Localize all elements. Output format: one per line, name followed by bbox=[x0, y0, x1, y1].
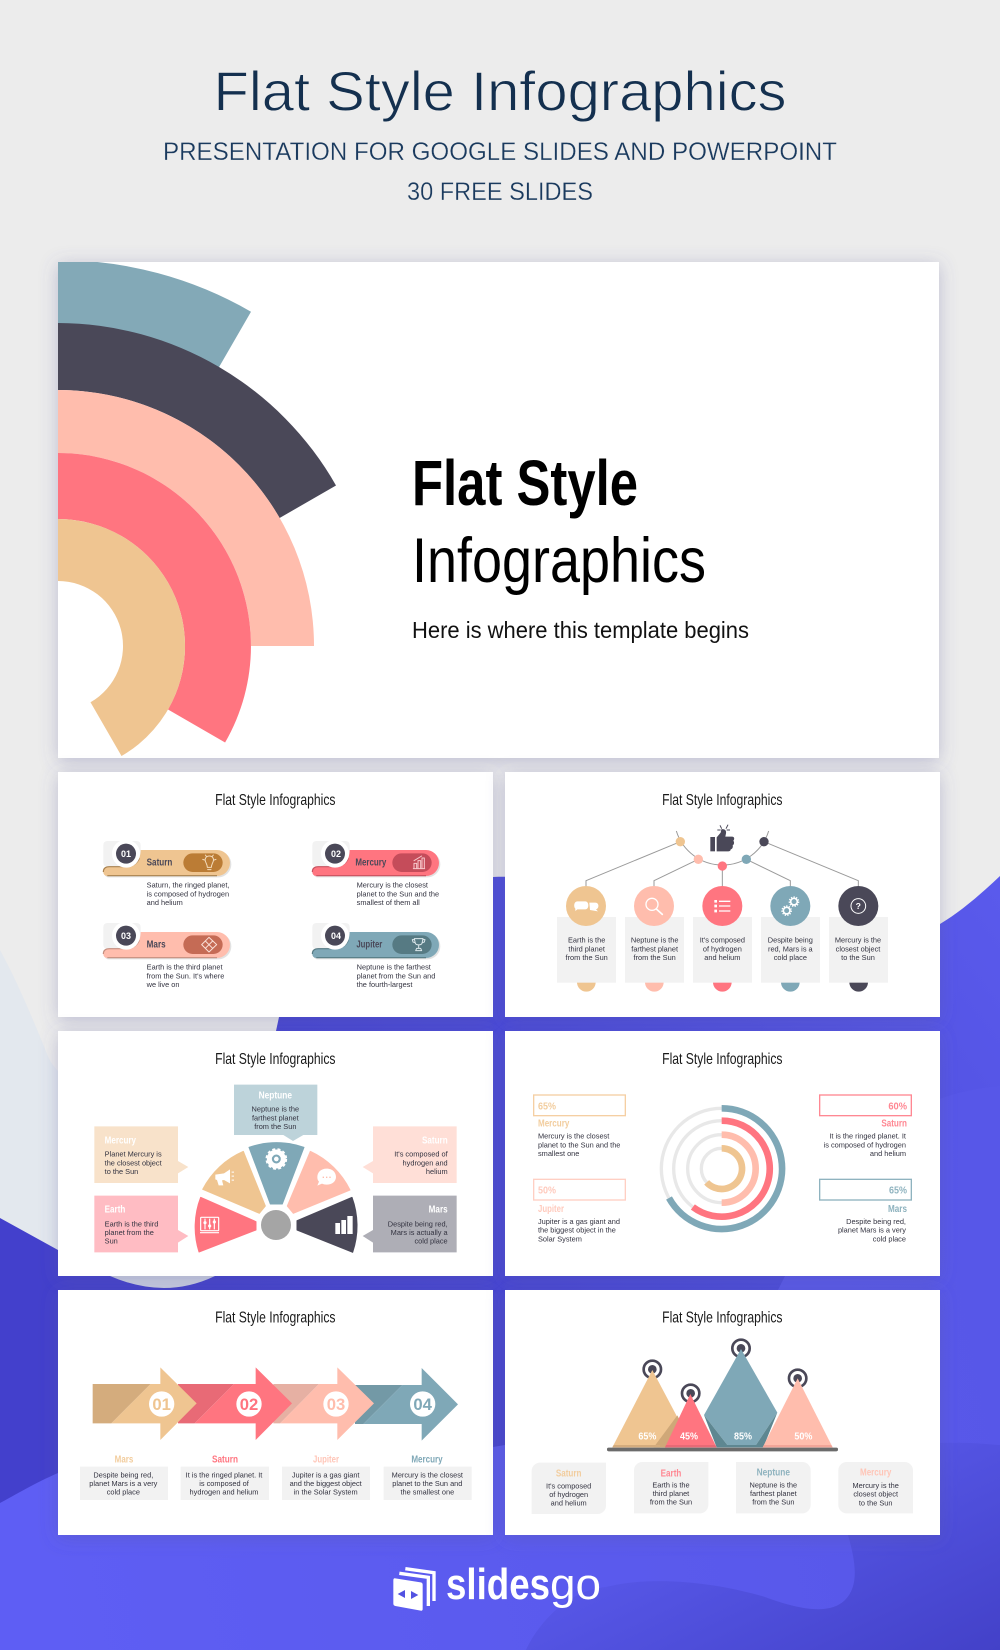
card: Neptune: from the Sun bbox=[634, 953, 676, 962]
card: Earth: Earth is the bbox=[568, 936, 605, 945]
card: composition bbox=[693, 886, 752, 992]
callout: Earth: Earth bbox=[105, 1205, 125, 1216]
icon: speech bubble bbox=[317, 1169, 336, 1186]
arrow 03 bbox=[273, 1367, 374, 1440]
card: Neptune: farthest planet bbox=[750, 1489, 797, 1498]
target markers bbox=[644, 1340, 806, 1402]
slide title: Flat Style Infographics bbox=[662, 1051, 782, 1068]
baseline bar bbox=[607, 1448, 838, 1451]
callout: Earth bbox=[94, 1196, 188, 1252]
callout: Saturn: helium bbox=[426, 1167, 448, 1176]
stat: Saturn: It is the ringed planet. It bbox=[829, 1132, 906, 1141]
stat: Jupiter: Jupiter is a gas giant and bbox=[538, 1217, 620, 1226]
callout: Saturn bbox=[363, 1126, 457, 1183]
item: Jupiter: Jupiter bbox=[356, 940, 382, 951]
item: Mercury: 02 bbox=[331, 849, 341, 859]
hero heading bbox=[412, 447, 706, 596]
item: Saturn bbox=[103, 840, 231, 907]
card: Saturn: It's composed bbox=[546, 1481, 591, 1490]
item: Saturn: is composed of hydrogen bbox=[147, 889, 229, 898]
label: Mars bbox=[80, 1455, 168, 1500]
callout: Mercury: Planet Mercury is bbox=[105, 1150, 162, 1159]
card: Mars bbox=[761, 886, 820, 992]
hero heading: Flat Style bbox=[412, 447, 638, 519]
stat: Mercury: planet to the Sun and the bbox=[538, 1140, 620, 1149]
stat: Mars: Mars bbox=[888, 1204, 907, 1215]
panel: numbered pills bbox=[58, 772, 493, 1017]
panel: triangle peaks bbox=[505, 1290, 940, 1535]
label: Jupiter: Jupiter is a gas giant bbox=[292, 1470, 359, 1479]
callout: Neptune: from the Sun bbox=[254, 1122, 296, 1131]
label: Mercury: Mercury bbox=[411, 1455, 443, 1466]
panel: radial progress bbox=[505, 1031, 940, 1276]
callout: Neptune bbox=[234, 1085, 317, 1141]
label: Jupiter: in the Solar System bbox=[294, 1488, 358, 1497]
stat: Saturn: 60% bbox=[888, 1101, 907, 1112]
item: Mars: Earth is the third planet bbox=[147, 963, 223, 972]
logo: slidesgo: slides bbox=[446, 1560, 550, 1609]
card: Saturn: of hydrogen bbox=[549, 1490, 588, 1499]
label: Mercury: Mercury is the closest bbox=[392, 1470, 463, 1479]
item: Mars: we live on bbox=[146, 980, 179, 989]
stat: Mars: 65% bbox=[889, 1186, 907, 1197]
card: Mercury: Mercury is the bbox=[835, 936, 881, 945]
item: Mars: 03 bbox=[121, 931, 131, 941]
card: Mercury: Mercury bbox=[860, 1468, 892, 1479]
label: Saturn: Saturn bbox=[212, 1455, 238, 1466]
label: Saturn: is composed of bbox=[199, 1479, 250, 1488]
card: Neptune bbox=[736, 1462, 811, 1513]
slide title: Flat Style Infographics bbox=[662, 792, 782, 809]
arrow 02: 02 bbox=[240, 1395, 258, 1414]
connector nodes bbox=[676, 837, 769, 871]
icon: thumbs up bbox=[710, 825, 734, 851]
stat: Jupiter bbox=[534, 1179, 625, 1243]
item: Jupiter bbox=[312, 922, 440, 989]
arrow 04 bbox=[355, 1368, 458, 1441]
card: Neptune: Neptune is the bbox=[631, 936, 678, 945]
hero subheading: Here is where this template begins bbox=[412, 617, 749, 643]
item: Mercury: planet to the Sun and the bbox=[357, 889, 439, 898]
callout: Mercury: to the Sun bbox=[105, 1167, 138, 1176]
card: Earth: third planet bbox=[653, 1489, 689, 1498]
callout: Mars bbox=[363, 1196, 457, 1252]
card: Earth bbox=[634, 1462, 708, 1513]
callout: Mercury: Mercury bbox=[105, 1135, 136, 1146]
item: Jupiter: planet from the Sun and bbox=[357, 971, 435, 980]
callout: Neptune: farthest planet bbox=[252, 1113, 299, 1122]
stat: Jupiter: Jupiter bbox=[538, 1204, 564, 1215]
arrow 02 bbox=[178, 1367, 292, 1440]
arrow 04: 04 bbox=[413, 1395, 433, 1414]
callout: Mars: cold place bbox=[414, 1237, 448, 1246]
stat: Mars: cold place bbox=[873, 1234, 906, 1243]
panel: semicircle segments bbox=[58, 1031, 493, 1276]
label: Mars: Mars bbox=[115, 1455, 134, 1466]
callout: Earth: Sun bbox=[105, 1237, 118, 1246]
triangle: 85%: 85% bbox=[734, 1432, 752, 1443]
arrow 03: 03 bbox=[327, 1395, 345, 1414]
card: Mars: red, Mars is a bbox=[768, 944, 814, 953]
slide title: Flat Style Infographics bbox=[662, 1310, 782, 1327]
card: composition: and helium bbox=[704, 953, 740, 962]
slide title: Flat Style Infographics bbox=[215, 1051, 335, 1068]
stat: Mercury: Mercury bbox=[538, 1119, 570, 1130]
card: Earth bbox=[557, 886, 616, 992]
card: Mercury: to the Sun bbox=[859, 1498, 892, 1507]
callout: Mars: Despite being red, bbox=[388, 1219, 448, 1228]
chart: semicircle bbox=[195, 1143, 357, 1252]
callout: Neptune: Neptune is the bbox=[252, 1105, 299, 1114]
label: Mercury: the smallest one bbox=[400, 1488, 454, 1497]
hero heading: Infographics bbox=[412, 526, 706, 596]
icon: slides stack bbox=[393, 1569, 434, 1611]
card: Neptune: from the Sun bbox=[752, 1498, 794, 1507]
card: composition: It's composed bbox=[700, 936, 745, 945]
item: Mercury bbox=[312, 840, 440, 907]
stat: Jupiter: the biggest object in the bbox=[538, 1226, 616, 1235]
card: Earth: Earth is the bbox=[652, 1480, 690, 1489]
card: Earth: from the Sun bbox=[566, 953, 608, 962]
card: Earth: Earth bbox=[661, 1468, 681, 1479]
panel: hero slide bbox=[58, 260, 939, 758]
stat: Mercury: 65% bbox=[538, 1101, 556, 1112]
card: Saturn: and helium bbox=[551, 1499, 587, 1508]
subtitle: PRESENTATION FOR GOOGLE SLIDES AND POWERPOINT bbox=[163, 138, 837, 166]
stat: Jupiter: Solar System bbox=[538, 1234, 582, 1243]
stat: Saturn: Saturn bbox=[881, 1119, 907, 1130]
connector lines bbox=[586, 831, 858, 887]
item: Jupiter: 04 bbox=[331, 931, 341, 941]
stat: Mars: planet Mars is a very bbox=[838, 1226, 906, 1235]
triangle: 50% bbox=[763, 1378, 833, 1447]
item: Mercury: Mercury is the closest bbox=[357, 881, 428, 890]
callout: Mars: Mars bbox=[429, 1205, 448, 1216]
label: Jupiter: Jupiter bbox=[313, 1455, 339, 1466]
item: Mercury: smallest of them all bbox=[357, 898, 420, 907]
callout: Earth: Earth is the third bbox=[105, 1219, 158, 1228]
item: Jupiter: the fourth-largest bbox=[357, 980, 412, 989]
card: Mars: cold place bbox=[774, 953, 807, 962]
card: Mercury: Mercury is the bbox=[853, 1481, 899, 1490]
label: Jupiter bbox=[282, 1455, 370, 1500]
stat: Saturn bbox=[820, 1095, 911, 1158]
card: Saturn bbox=[532, 1463, 606, 1514]
slide title: Flat Style Infographics bbox=[215, 1310, 335, 1327]
logo: slidesgo: go bbox=[550, 1560, 601, 1609]
stat: Jupiter: 50% bbox=[538, 1186, 556, 1197]
card: Mercury: closest object bbox=[836, 944, 880, 953]
title: Flat Style Infographics bbox=[214, 60, 786, 122]
item: Jupiter: Neptune is the farthest bbox=[357, 963, 431, 972]
card: Earth: third planet bbox=[568, 944, 605, 953]
item: Mars bbox=[103, 922, 231, 989]
label: Saturn bbox=[181, 1455, 269, 1500]
callout: Earth: planet from the bbox=[105, 1228, 154, 1237]
chart: concentric arcs bbox=[58, 260, 336, 756]
stat: Mars: Despite being red, bbox=[846, 1217, 906, 1226]
card: composition: of hydrogen bbox=[703, 944, 742, 953]
label: Mars: cold place bbox=[107, 1488, 140, 1497]
triangle: 65% bbox=[612, 1370, 693, 1447]
callout: Saturn: hydrogen and bbox=[403, 1158, 448, 1167]
chart: concentric rings bbox=[661, 1108, 782, 1229]
item: Saturn: Saturn bbox=[147, 858, 172, 869]
card: Saturn: Saturn bbox=[556, 1468, 581, 1479]
stat: Saturn: is composed of hydrogen bbox=[824, 1140, 906, 1149]
arrow 01 bbox=[93, 1367, 197, 1440]
card: Neptune: Neptune bbox=[757, 1468, 790, 1479]
card: Mercury bbox=[838, 1462, 913, 1513]
icon: megaphone bbox=[215, 1169, 234, 1185]
panel: arrows bbox=[58, 1290, 493, 1535]
icon: sliders bbox=[200, 1217, 219, 1233]
label: Jupiter: and the biggest object bbox=[290, 1479, 362, 1488]
label: Mercury bbox=[384, 1455, 472, 1500]
arrow 01: 01 bbox=[152, 1395, 171, 1414]
card: Mercury: to the Sun bbox=[841, 953, 875, 962]
card: Mercury: ? bbox=[856, 901, 861, 911]
label: Saturn: hydrogen and helium bbox=[190, 1488, 258, 1497]
card: Mars: Despite being bbox=[768, 936, 813, 945]
card: Neptune: Neptune is the bbox=[750, 1480, 797, 1489]
callout: Mercury: the closest object bbox=[105, 1158, 162, 1167]
stat: Mercury: smallest one bbox=[538, 1149, 579, 1158]
item: Mars: from the Sun. It's where bbox=[147, 971, 224, 980]
item: Saturn: and helium bbox=[147, 898, 183, 907]
stat: Mars bbox=[820, 1179, 911, 1243]
card: Earth: from the Sun bbox=[650, 1498, 692, 1507]
item: Mars: Mars bbox=[147, 940, 166, 951]
triangle: 45%: 45% bbox=[680, 1432, 698, 1443]
label: Mars: planet Mars is a very bbox=[89, 1479, 158, 1488]
logo: slidesgo bbox=[393, 1560, 601, 1611]
subtitle: 30 FREE SLIDES bbox=[407, 178, 593, 206]
callout: Neptune: Neptune bbox=[259, 1090, 292, 1101]
callout: Saturn: It's composed of bbox=[394, 1150, 449, 1159]
label: Mars: Despite being red, bbox=[93, 1470, 153, 1479]
triangle: 65%: 65% bbox=[638, 1432, 656, 1443]
callout: Mercury bbox=[94, 1126, 188, 1183]
triangle: 50%: 50% bbox=[794, 1432, 812, 1443]
item: Mercury: Mercury bbox=[355, 858, 387, 869]
subtitle bbox=[163, 138, 837, 206]
card: Mercury: closest object bbox=[853, 1490, 898, 1499]
item: Saturn: Saturn, the ringed planet, bbox=[147, 881, 229, 890]
triangle: 85% bbox=[704, 1349, 777, 1447]
label: Saturn: It is the ringed planet. It bbox=[186, 1470, 262, 1479]
panel: connected circles bbox=[505, 772, 940, 1017]
stat: Saturn: and helium bbox=[870, 1149, 906, 1158]
stat: Mercury bbox=[534, 1095, 625, 1158]
callout: Saturn: Saturn bbox=[422, 1135, 448, 1146]
callout: Mars: Mars is actually a bbox=[391, 1228, 449, 1237]
triangle: 45% bbox=[665, 1394, 717, 1447]
icon: gear bbox=[266, 1149, 286, 1169]
card: Mercury bbox=[829, 886, 888, 992]
item: Saturn: 01 bbox=[121, 849, 131, 859]
card: Neptune: farthest planet bbox=[631, 944, 678, 953]
bar icon bbox=[335, 1216, 353, 1234]
stat: Mercury: Mercury is the closest bbox=[538, 1132, 609, 1141]
label: Mercury: planet to the Sun and bbox=[392, 1479, 462, 1488]
slide title: Flat Style Infographics bbox=[215, 792, 335, 809]
card: Neptune bbox=[625, 886, 684, 992]
